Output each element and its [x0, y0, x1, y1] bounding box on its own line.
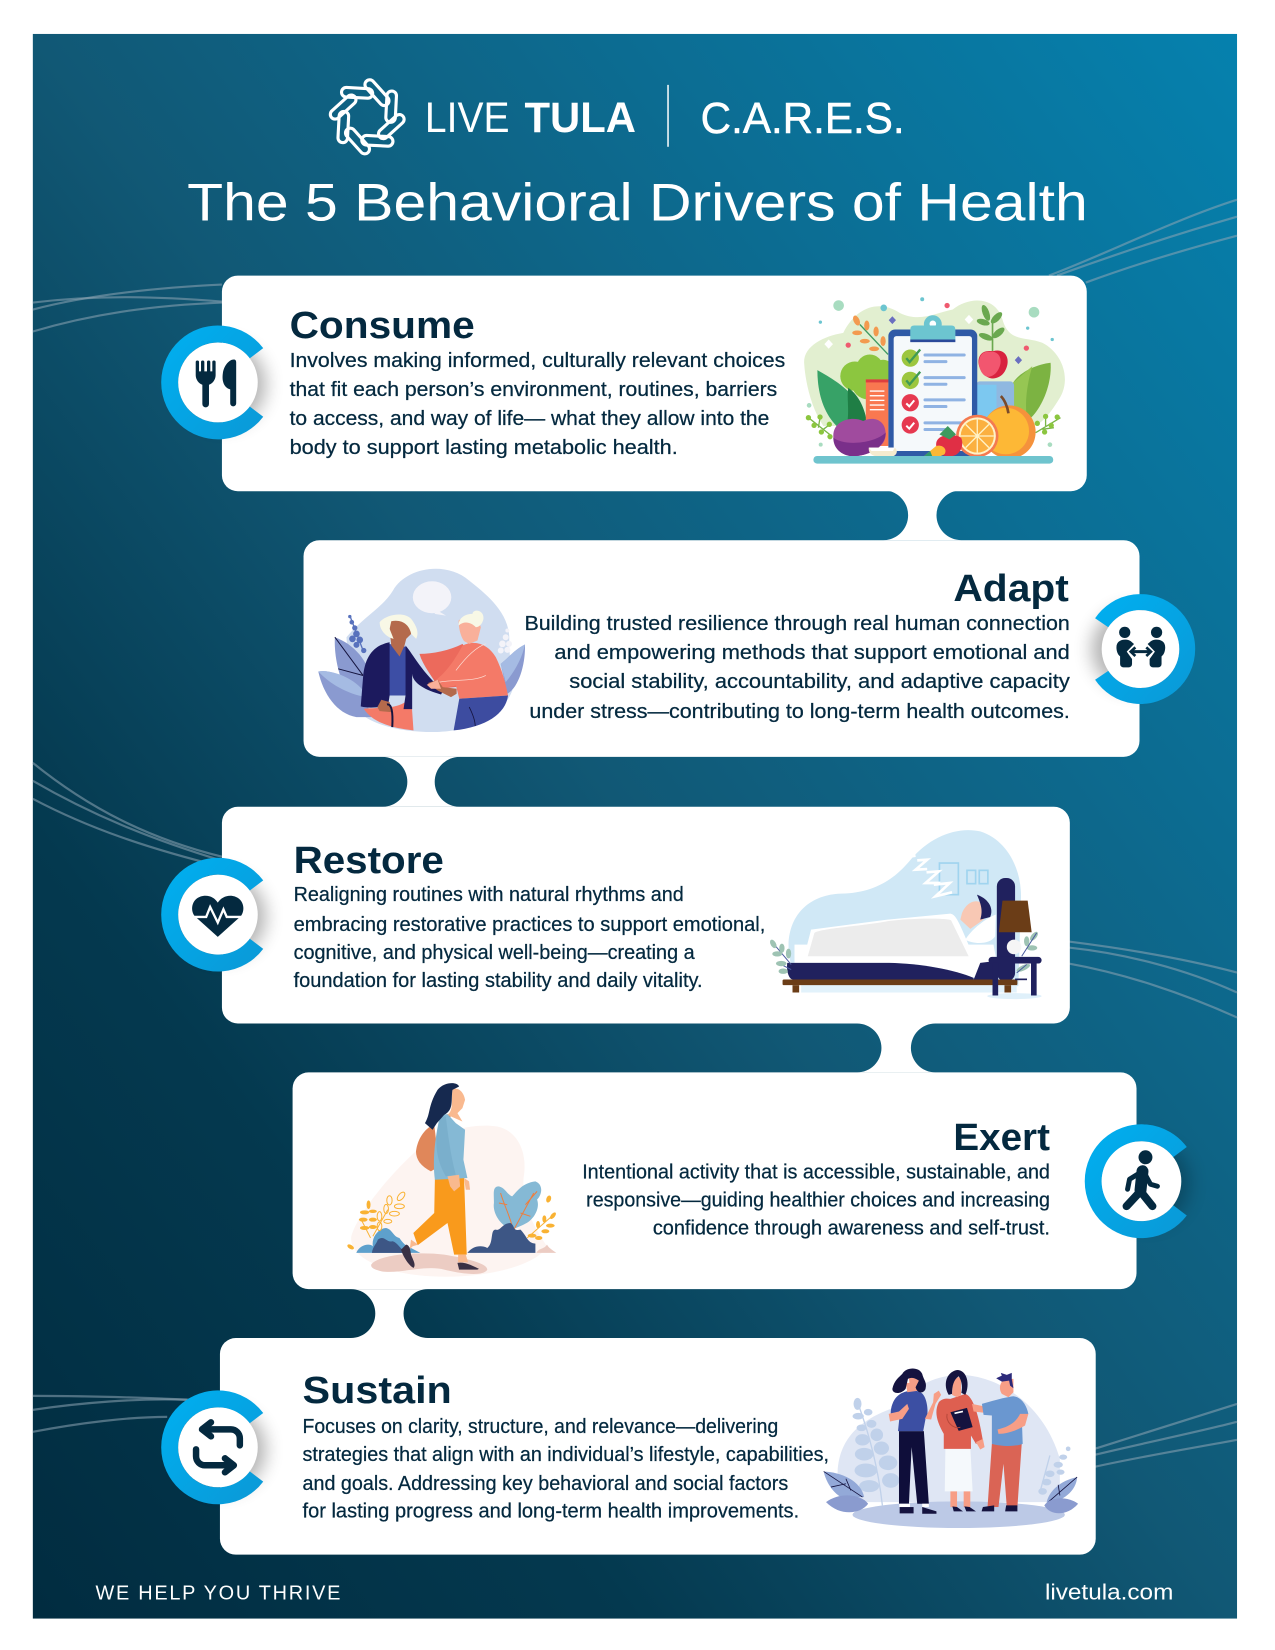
icon: braided ring logo — [328, 78, 406, 156]
panel: sustain — [220, 1338, 1096, 1555]
illustration: food checklist — [804, 297, 1065, 464]
text: adapt description: under stress—contributing to long-term health outcomes. — [529, 701, 1070, 723]
text: sustain description — [303, 1416, 829, 1523]
text: exert description: responsive—guiding healthier choices and increasing — [586, 1190, 1050, 1212]
text: restore description: embracing restorative practices to support emotional, — [294, 914, 765, 936]
panel: adapt — [304, 540, 1140, 757]
panel: exert — [293, 1072, 1137, 1289]
brand name bold: TULA — [524, 94, 636, 142]
text: restore description: Realigning routines with natural rhythms and — [294, 884, 684, 906]
heading: consume: Consume — [290, 305, 475, 347]
heading: restore: Restore — [294, 840, 444, 882]
text: exert description: confidence through awareness and self-trust. — [653, 1218, 1050, 1240]
footer website: livetula.com — [1045, 1580, 1173, 1605]
text: restore description — [294, 884, 765, 992]
text: restore description: cognitive, and physical well-being—creating a — [294, 942, 696, 964]
heading: exert: Exert — [953, 1117, 1050, 1159]
text: exert description — [582, 1162, 1050, 1240]
heading: sustain: Sustain — [303, 1370, 452, 1412]
text: sustain description: Focuses on clarity, structure, and relevance—delivering — [303, 1416, 778, 1438]
text: adapt description: social stability, accountability, and adaptive capacity — [569, 671, 1070, 693]
panel: consume — [222, 276, 1087, 491]
icon: sustain badge — [170, 1399, 266, 1496]
text: restore description: foundation for lasting stability and daily vitality. — [294, 970, 703, 992]
connector: restore to exert — [857, 1023, 935, 1072]
illustration: person sleeping in bed — [769, 830, 1042, 999]
text: consume description: to access, and way of life— what they allow into the — [290, 408, 769, 430]
title: The 5 Behavioral Drivers of Health — [187, 174, 1088, 233]
connector: adapt to restore — [382, 757, 460, 807]
connector: exert to sustain — [351, 1289, 428, 1338]
panel: restore — [222, 807, 1070, 1023]
connector: consume to adapt — [883, 490, 961, 540]
text: adapt description: Building trusted resilience through real human connection — [524, 613, 1070, 635]
text: sustain description: and goals. Addressing key behavioral and social factors — [303, 1473, 788, 1495]
illustration: two older women talking — [318, 569, 525, 732]
text: consume description: Involves making informed, culturally relevant choices — [290, 350, 785, 372]
text: exert description: Intentional activity that is accessible, sustainable, and — [582, 1162, 1050, 1184]
footer tagline: WE HELP YOU THRIVE — [96, 1583, 340, 1605]
heading: adapt: Adapt — [953, 568, 1069, 610]
icon: consume badge — [170, 334, 266, 431]
icon: adapt badge — [1092, 602, 1187, 696]
divider — [667, 85, 669, 147]
text: consume description — [290, 350, 785, 459]
text: sustain description: for lasting progress and long-term health improvements. — [303, 1501, 799, 1523]
icon: exert badge — [1093, 1133, 1189, 1230]
illustration: three people together — [824, 1369, 1078, 1528]
text: adapt description — [524, 613, 1070, 723]
logo: Live Tula C.A.R.E.S. header — [328, 78, 905, 156]
text: consume description: body to support lasting metabolic health. — [290, 437, 678, 459]
text: sustain description: strategies that align with an individual’s lifestyle, capabilities, — [303, 1444, 829, 1466]
program name: C.A.R.E.S. — [701, 94, 905, 143]
icon: restore badge — [170, 866, 266, 963]
brand name: LIVE — [425, 94, 510, 142]
text: adapt description: and empowering methods that support emotional and — [554, 642, 1070, 664]
text: consume description: that fit each person’s environment, routines, barriers — [290, 379, 777, 401]
illustration: woman walking — [346, 1083, 557, 1277]
